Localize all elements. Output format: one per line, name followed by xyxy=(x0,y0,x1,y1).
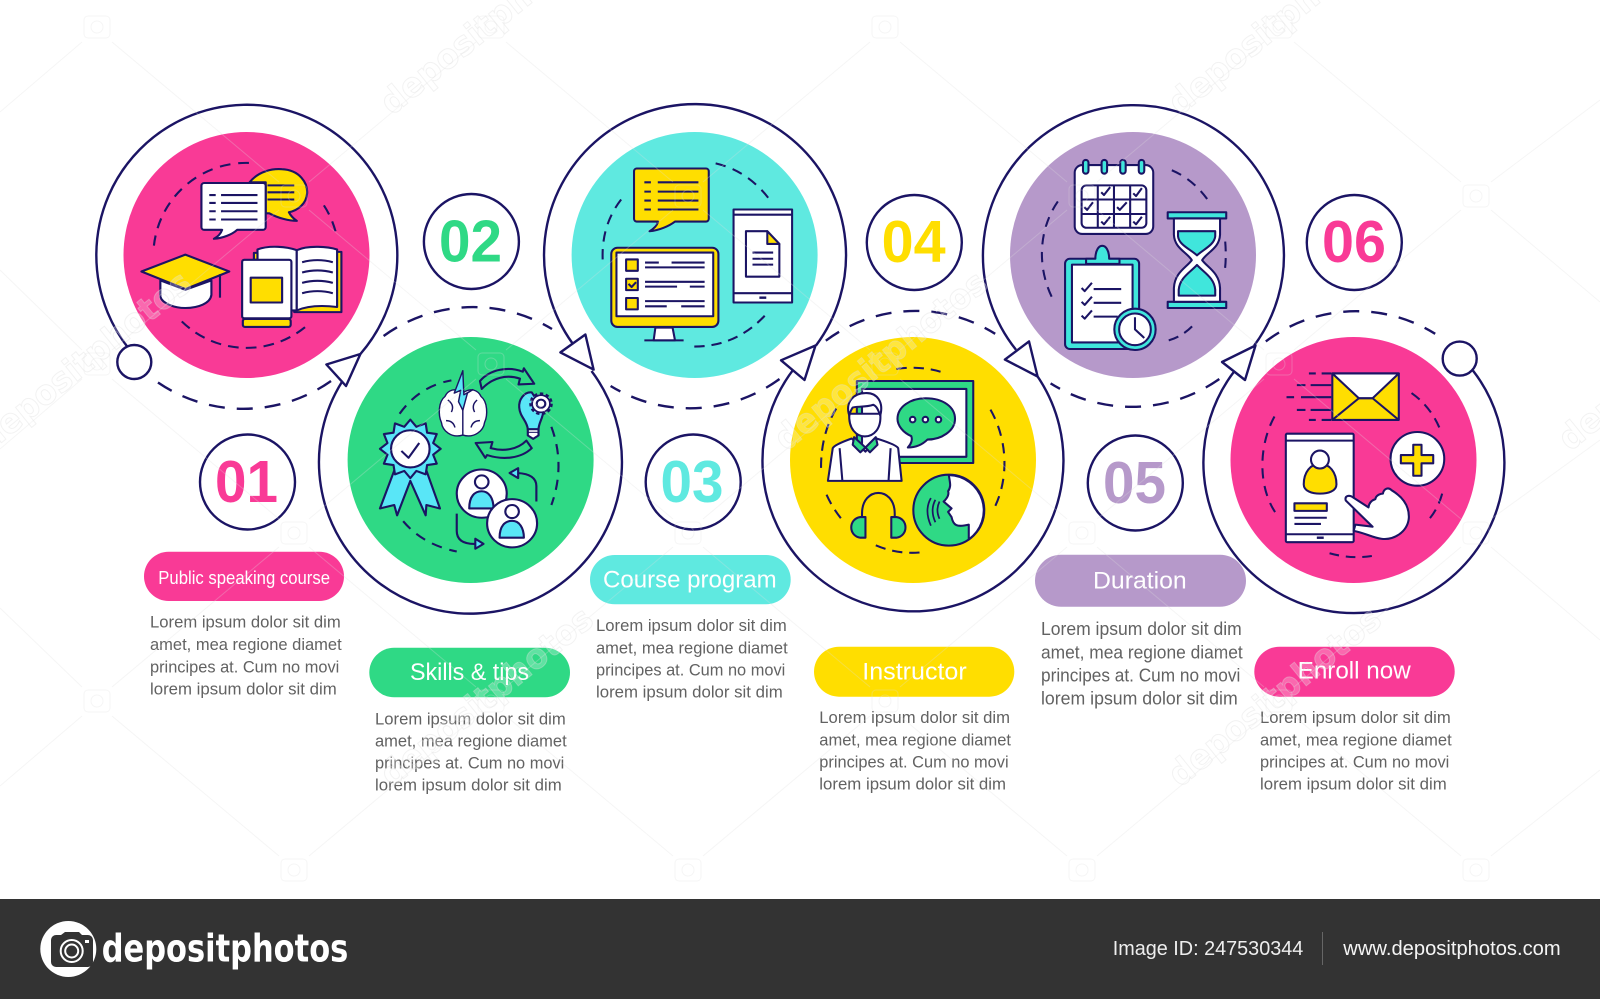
text block 2: lorem ipsum dolor sit dim xyxy=(375,776,562,795)
text block 4: principes at. Cum no movi xyxy=(819,753,1009,772)
icon group: speech bubbles, cap and books xyxy=(141,163,341,348)
label pill: Enroll now xyxy=(1254,647,1455,697)
text block 6: lorem ipsum dolor sit dim xyxy=(1260,775,1447,794)
text block 1 xyxy=(150,613,342,698)
logo: camera mark xyxy=(40,921,96,977)
website: www.depositphotos.com xyxy=(1342,938,1561,960)
number badge 06: 06 xyxy=(1322,209,1386,275)
disc: step 3 xyxy=(572,132,818,378)
label pill: Skills & tips xyxy=(369,648,570,697)
text block 5 xyxy=(1041,619,1243,709)
label pill: Instructor xyxy=(814,647,1014,697)
disc: step 1 xyxy=(124,132,370,378)
label pill: Duration: Duration xyxy=(1093,567,1187,594)
text block 2: principes at. Cum no movi xyxy=(375,754,564,773)
arrow 3 xyxy=(781,346,816,380)
icon group: brain, bulb, badge and people xyxy=(380,368,559,551)
label pill: Enroll now: Enroll now xyxy=(1298,658,1411,685)
label pill: Public speaking course xyxy=(144,552,344,601)
number badge 01 xyxy=(200,434,295,530)
label pill: Course program: Course program xyxy=(603,566,777,593)
end marker xyxy=(1443,342,1477,376)
label pill: Course program xyxy=(590,555,791,604)
text block 6: principes at. Cum no movi xyxy=(1260,753,1449,772)
text block 3: Lorem ipsum dolor sit dim xyxy=(596,616,787,635)
label pill: Public speaking course: Public speaking course xyxy=(158,568,330,588)
icon group: flying mail, phone profile and plus xyxy=(1262,373,1444,557)
text block 1: amet, mea regione diamet xyxy=(150,635,342,654)
text block 3: principes at. Cum no movi xyxy=(596,661,785,680)
text block 2 xyxy=(375,709,567,795)
disc: step 6 xyxy=(1230,337,1476,583)
image id: Image ID: 247530344 xyxy=(1113,938,1303,960)
icon group: instructor, board, headphones and speaking head xyxy=(821,368,1004,553)
text block 6: Lorem ipsum dolor sit dim xyxy=(1260,708,1451,727)
timeline path: rings and dashed connectors xyxy=(96,104,1504,614)
watermark text xyxy=(0,0,1600,795)
text block 1: principes at. Cum no movi xyxy=(150,657,339,676)
text block 3: lorem ipsum dolor sit dim xyxy=(596,683,783,702)
text block 5: Lorem ipsum dolor sit dim xyxy=(1041,619,1242,639)
arrow 5 xyxy=(1222,346,1256,380)
label pill: Duration xyxy=(1035,555,1246,607)
number badge 03: 03 xyxy=(660,449,724,515)
label pill: Skills & tips: Skills & tips xyxy=(410,659,529,686)
logo: wordmark: depositphotos xyxy=(102,927,348,971)
text block 5: amet, mea regione diamet xyxy=(1041,642,1243,662)
start marker xyxy=(117,345,151,379)
number badge 05: 05 xyxy=(1103,450,1166,516)
icon group: chat, checklist monitor and tablet xyxy=(603,163,792,347)
number badge 05 xyxy=(1088,436,1183,530)
number badge 03 xyxy=(646,434,741,530)
watermark text: depositphotos xyxy=(1160,599,1389,795)
watermark text: depositphotos xyxy=(372,599,601,795)
text block 4 xyxy=(819,708,1011,794)
number badge 02: 02 xyxy=(439,208,502,274)
text block 1: lorem ipsum dolor sit dim xyxy=(150,679,337,698)
text block 3 xyxy=(596,616,788,702)
text block 4: lorem ipsum dolor sit dim xyxy=(819,775,1006,794)
number badge 02 xyxy=(424,194,519,289)
text block 5: principes at. Cum no movi xyxy=(1041,666,1240,686)
text block 4: amet, mea regione diamet xyxy=(819,730,1011,749)
text block 2: amet, mea regione diamet xyxy=(375,731,567,750)
number badge 04: 04 xyxy=(882,209,946,275)
text block 2: Lorem ipsum dolor sit dim xyxy=(375,709,566,728)
number badge 01: 01 xyxy=(215,449,278,515)
text block 4: Lorem ipsum dolor sit dim xyxy=(819,708,1010,727)
number badge 04 xyxy=(867,195,962,290)
text block 3: amet, mea regione diamet xyxy=(596,638,788,657)
footer bar xyxy=(0,899,1600,999)
disc: step 4 xyxy=(790,337,1036,583)
text block 6 xyxy=(1260,708,1452,794)
number badge 06 xyxy=(1307,195,1402,290)
watermark text: depositphotos xyxy=(766,263,995,459)
text block 5: lorem ipsum dolor sit dim xyxy=(1041,689,1238,709)
icon group: calendar, clipboard, hourglass xyxy=(1042,160,1226,350)
arrow 2 xyxy=(560,334,594,370)
disc: step 2 xyxy=(348,337,594,583)
text block 1: Lorem ipsum dolor sit dim xyxy=(150,613,341,632)
label pill: Instructor: Instructor xyxy=(862,658,967,685)
text block 6: amet, mea regione diamet xyxy=(1260,730,1452,749)
arrow 4 xyxy=(1005,341,1038,376)
disc: step 5 xyxy=(1010,132,1256,378)
arrow 1 xyxy=(326,354,360,386)
